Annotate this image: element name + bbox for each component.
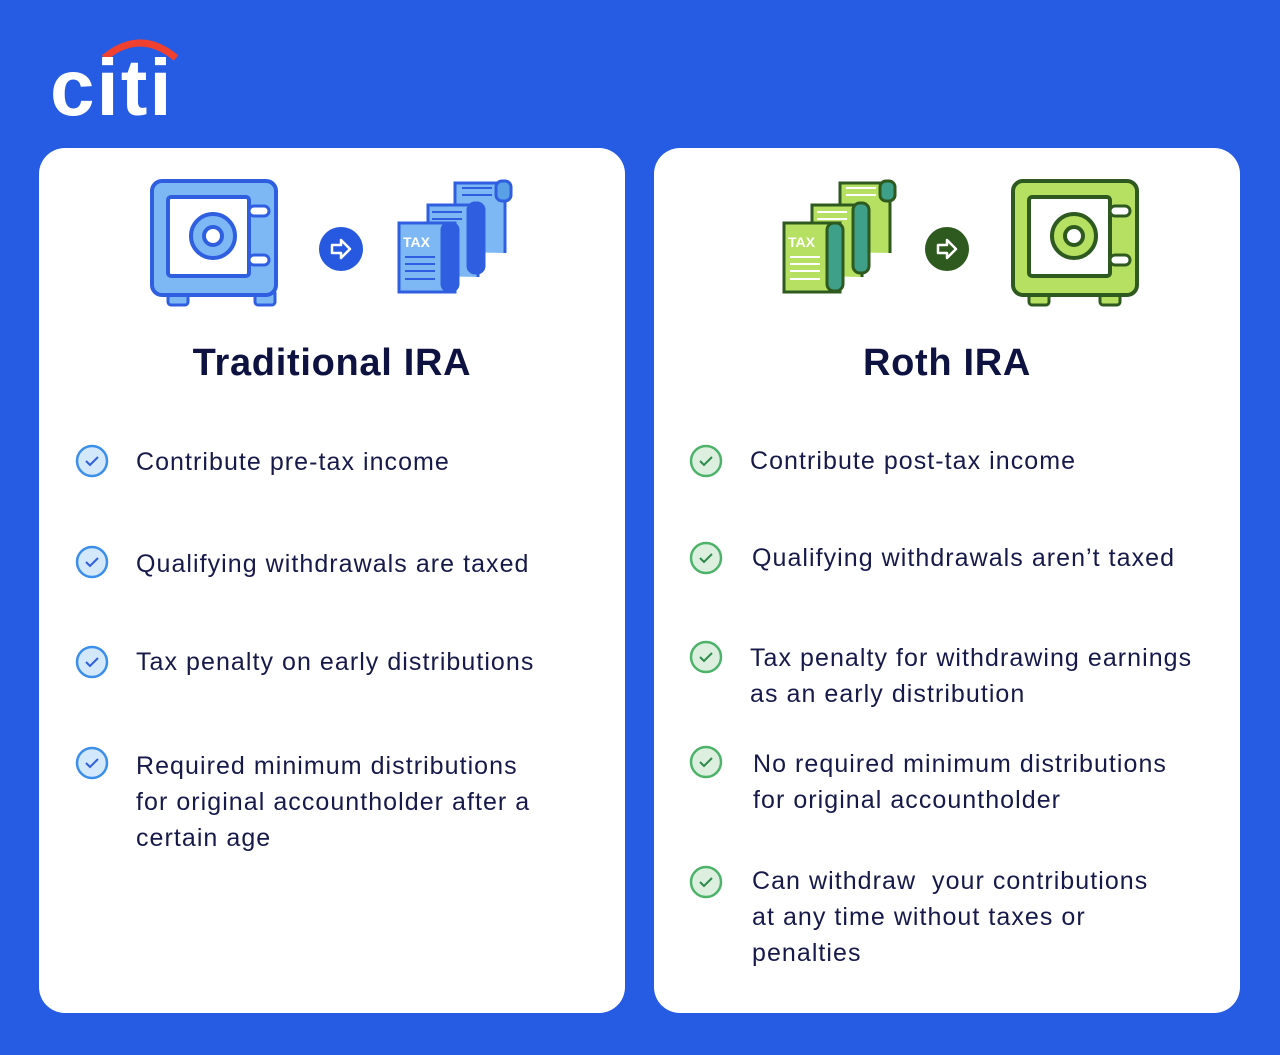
panel: roth IRA: No required minimum distributions [753,750,1167,778]
panel: roth IRA [654,148,1240,1013]
heading: Traditional IRA [193,342,471,384]
panel: traditional IRA: for original accountholder after a [136,788,530,816]
item 2 [690,542,1175,574]
panel: traditional IRA [39,148,625,1013]
arrow: blue [319,227,363,271]
panel: roth IRA: Can withdraw your contributions [752,867,1148,895]
panel: roth IRA: as an early distribution [750,680,1025,708]
icon: green tax documents [782,180,896,294]
icon: green tax documents: TAX [788,234,816,250]
panel: roth IRA: Tax penalty for withdrawing earnings [750,644,1192,672]
icon: blue tax documents [398,180,512,294]
panel: roth IRA: Contribute post-tax income [750,447,1076,475]
panel: traditional IRA: Contribute pre-tax income [136,448,450,476]
item 1 [690,444,1076,478]
arrow: green [925,227,969,271]
list: roth features [690,444,1192,967]
panel: traditional IRA: Tax penalty on early distributions [136,648,534,676]
item 2 [76,546,530,578]
item 5 [690,866,1148,967]
icon: green safe [1011,179,1139,306]
heading: Roth IRA [863,342,1031,384]
item 1 [76,444,450,478]
panel: roth IRA: Qualifying withdrawals aren’t taxed [752,544,1175,572]
panel: traditional IRA: certain age [136,824,271,852]
item 3 [76,646,534,678]
list: traditional features [76,444,534,852]
panel: traditional IRA: Required minimum distributions [136,752,518,780]
item 4 [690,746,1167,814]
icon: blue safe [150,179,278,306]
panel: roth IRA: for original accountholder [753,786,1061,814]
panel: roth IRA: at any time without taxes or [752,903,1086,931]
item 4 [76,746,530,852]
icon: blue tax documents: TAX [403,234,431,250]
panel: roth IRA: penalties [752,939,862,967]
panel: traditional IRA: Qualifying withdrawals are taxed [136,550,530,578]
item 3 [690,640,1192,708]
